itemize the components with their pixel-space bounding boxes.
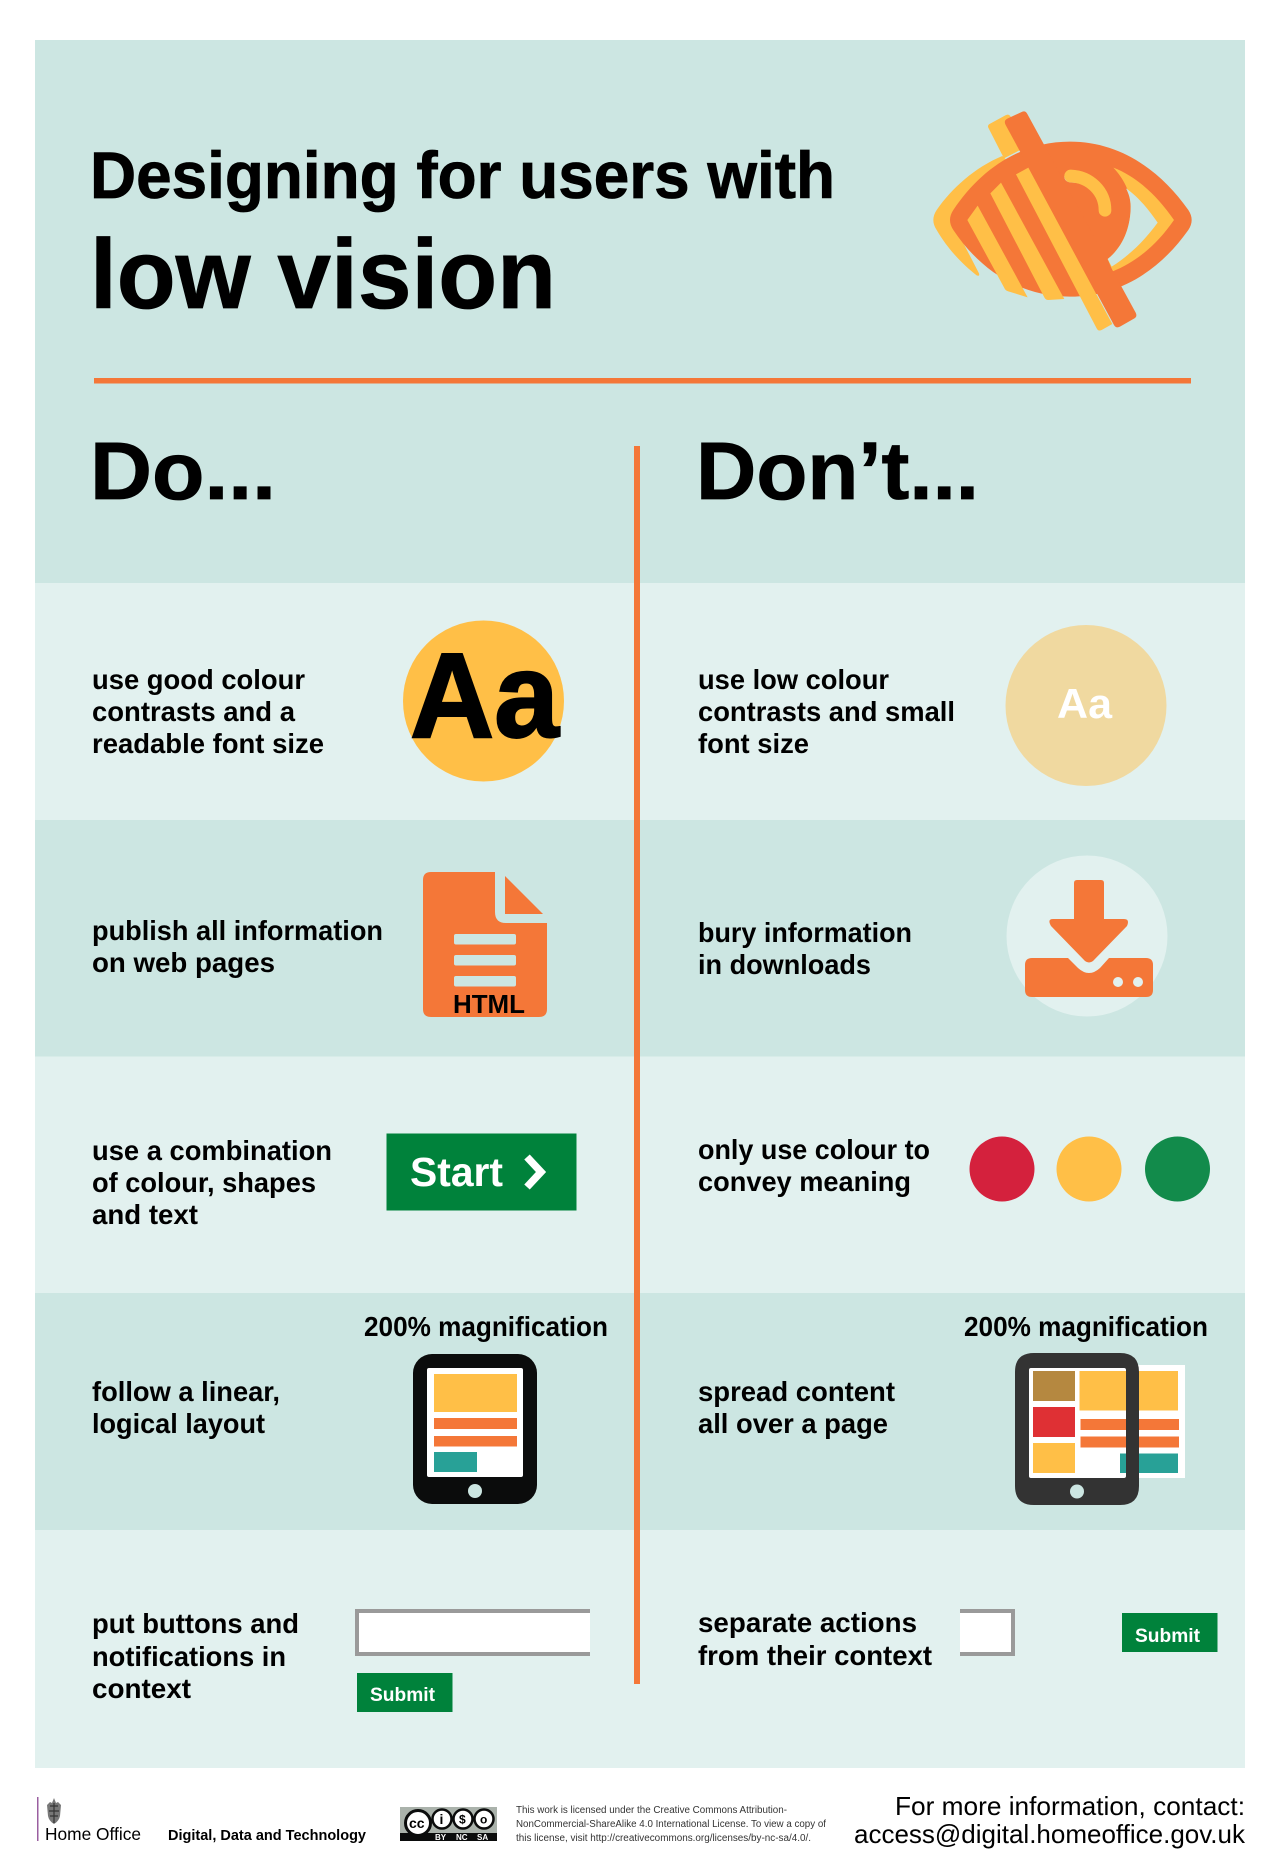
text: combination of colour, shapes and text: of colour, shapes bbox=[92, 1167, 316, 1198]
panel: row 3 bbox=[35, 1056, 1245, 1293]
icon: HTML document: HTML bbox=[453, 991, 525, 1019]
text: combination of colour, shapes and text: and text bbox=[92, 1199, 198, 1230]
text: linear layout bbox=[92, 1376, 280, 1439]
footer: Creative Commons badge: cc bbox=[409, 1815, 425, 1831]
label: 200% magnification right: 200% magnification bbox=[964, 1311, 1208, 1342]
form: input with adjacent submit: Submit bbox=[370, 1684, 435, 1706]
text: buttons in context: context bbox=[92, 1673, 191, 1704]
title bbox=[90, 138, 835, 329]
text: buttons in context bbox=[92, 1608, 299, 1704]
icon: tablet with linear layout bbox=[413, 1354, 537, 1504]
text: good colour contrasts: contrasts and a bbox=[92, 696, 296, 727]
panel: row 4 bbox=[35, 1293, 1245, 1530]
text: combination of colour, shapes and text: use a combination bbox=[92, 1135, 332, 1166]
panel: row 1 bbox=[35, 583, 1245, 820]
text: separate actions: from their context bbox=[698, 1640, 932, 1671]
form: input separated from submit bbox=[960, 1609, 1218, 1656]
text: separate actions: separate actions bbox=[698, 1607, 917, 1638]
footer: Creative Commons badge: o bbox=[480, 1812, 487, 1826]
footer: Creative Commons badge: NC bbox=[456, 1833, 468, 1842]
text: spread content: spread content bbox=[698, 1376, 895, 1407]
footer: licence text: This work is licensed under the Creative Commons Attribution- bbox=[516, 1805, 787, 1816]
text: only use colour: convey meaning bbox=[698, 1166, 911, 1197]
text: low colour contrasts: font size bbox=[698, 728, 809, 759]
footer: Home Office logo bbox=[37, 1797, 141, 1844]
footer: Creative Commons badge: i bbox=[440, 1811, 443, 1827]
divider: horizontal orange rule bbox=[94, 378, 1191, 384]
text: good colour contrasts bbox=[92, 664, 324, 759]
panel: row 5 bbox=[35, 1530, 1245, 1768]
heading: Do: Do... bbox=[90, 426, 276, 517]
title: low vision bbox=[90, 219, 556, 329]
icon: traffic light circles bbox=[970, 1136, 1210, 1202]
icon: low contrast Aa: Aa bbox=[1057, 680, 1113, 727]
panel: row 2 bbox=[35, 820, 1245, 1056]
text: bury information: bury information bbox=[698, 917, 912, 948]
divider: vertical orange rule bbox=[634, 446, 640, 1684]
title: Designing for users with bbox=[90, 138, 835, 212]
label: 200% magnification left: 200% magnification bbox=[364, 1311, 608, 1342]
footer: Digital, Data and Technology: Digital, Data and Technology bbox=[168, 1828, 366, 1844]
footer: Creative Commons badge: $ bbox=[459, 1812, 466, 1826]
icon: download bbox=[1006, 856, 1168, 1016]
icon: tablet with content overflowing bbox=[1015, 1353, 1185, 1505]
text: linear layout: logical layout bbox=[92, 1408, 265, 1439]
text: only use colour: only use colour to bbox=[698, 1134, 930, 1165]
text: linear layout: follow a linear, bbox=[92, 1376, 280, 1407]
text: bury information: in downloads bbox=[698, 949, 871, 980]
text: buttons in context: notifications in bbox=[92, 1641, 286, 1672]
text: publish on web pages: on web pages bbox=[92, 947, 275, 978]
text: good colour contrasts: readable font size bbox=[92, 728, 324, 759]
text: only use colour bbox=[698, 1134, 930, 1197]
text: low colour contrasts: contrasts and small bbox=[698, 696, 955, 727]
footer: contact bbox=[854, 1791, 1246, 1849]
text: publish on web pages: publish all information bbox=[92, 915, 383, 946]
icon: high contrast Aa: Aa bbox=[410, 627, 561, 763]
footer: Creative Commons badge bbox=[400, 1807, 497, 1842]
footer: contact: For more information, contact: bbox=[895, 1791, 1245, 1821]
icon: HTML document bbox=[423, 872, 547, 1019]
footer: licence text: NonCommercial-ShareAlike 4.0 International License. To view a copy of bbox=[516, 1819, 826, 1830]
text: separate actions bbox=[698, 1607, 932, 1671]
footer: Creative Commons badge: SA bbox=[477, 1833, 488, 1842]
button: Start bbox=[386, 1134, 576, 1210]
text: publish on web pages bbox=[92, 915, 383, 978]
text: low colour contrasts: use low colour bbox=[698, 664, 889, 695]
text: low colour contrasts bbox=[698, 664, 955, 759]
footer: Home Office logo: Home Office bbox=[45, 1824, 141, 1844]
button: Start: Start bbox=[410, 1149, 503, 1195]
footer: contact: access@digital.homeoffice.gov.uk bbox=[854, 1819, 1246, 1849]
footer: licence text bbox=[516, 1805, 826, 1844]
footer: Creative Commons badge: BY bbox=[435, 1833, 447, 1842]
form: input with adjacent submit bbox=[355, 1609, 590, 1712]
text: bury information bbox=[698, 917, 912, 980]
text: spread content: all over a page bbox=[698, 1408, 888, 1439]
text: good colour contrasts: use good colour bbox=[92, 664, 305, 695]
text: buttons in context: put buttons and bbox=[92, 1608, 299, 1639]
footer: licence text: this license, visit http://creativecommons.org/licenses/by-nc-sa/4.0/. bbox=[516, 1833, 811, 1844]
heading: Don't: Don’t... bbox=[696, 426, 979, 517]
text: combination of colour, shapes and text bbox=[92, 1135, 332, 1230]
icon: crossed-out eye bbox=[933, 111, 1192, 331]
panel: header bbox=[35, 40, 1245, 583]
text: spread content bbox=[698, 1376, 895, 1439]
form: input separated from submit: Submit bbox=[1135, 1625, 1200, 1647]
icon: low contrast Aa bbox=[1006, 625, 1166, 786]
